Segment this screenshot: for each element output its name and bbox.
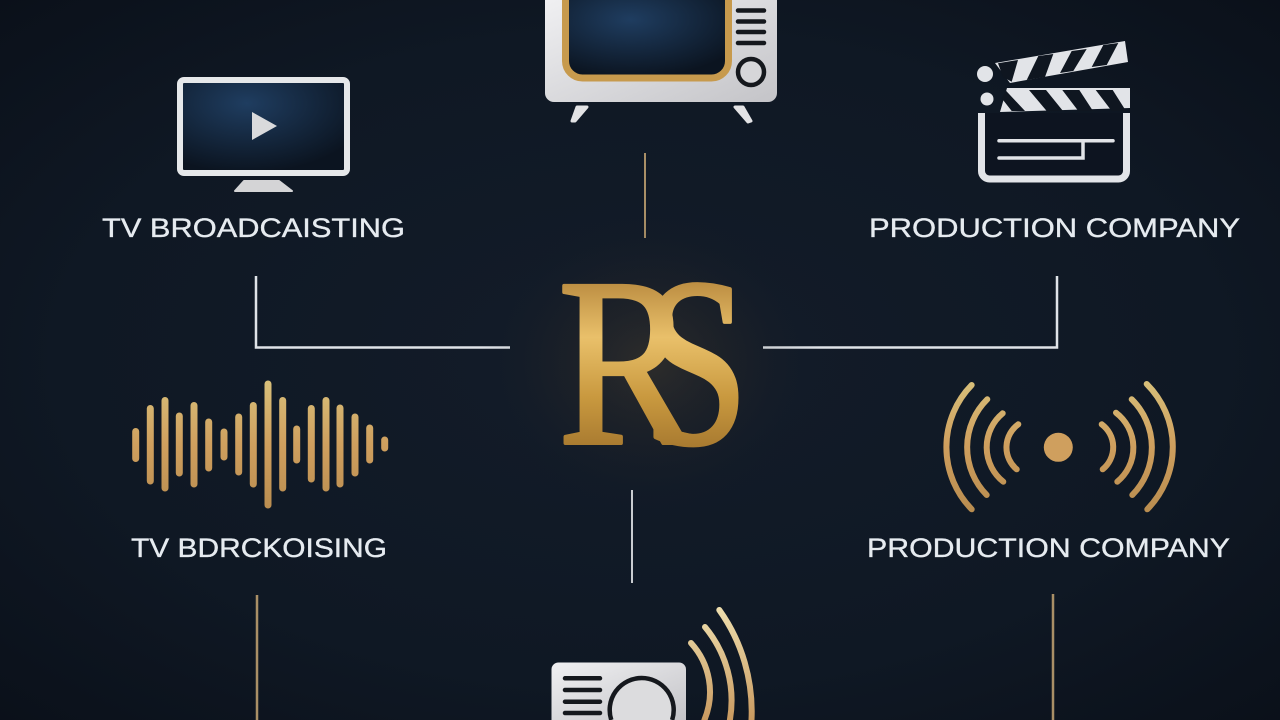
- connector: bottom centre: [631, 490, 633, 583]
- icon: broadcast signal: [946, 384, 1173, 509]
- label: TV broadcasting: TV BROADCAISTING: [102, 213, 405, 243]
- icon: clapperboard: [977, 41, 1130, 179]
- connector: left elbow: [256, 276, 510, 348]
- label: TV broadcasting lower: TV BDRCKOISING: [131, 533, 387, 563]
- connector: bottom right: [1052, 594, 1054, 720]
- icon: sound wave: [136, 384, 385, 505]
- icon: projector with signal arcs: [552, 610, 752, 720]
- icon: monitor with play button: [180, 80, 347, 191]
- logo: RS monogram: R: [558, 231, 696, 496]
- connector: top centre: [644, 153, 646, 238]
- connector: right elbow: [763, 276, 1057, 348]
- label: production company lower: PRODUCTION COMPANY: [867, 533, 1230, 563]
- icon: retro television: [545, 0, 777, 122]
- connector: bottom left: [256, 595, 258, 720]
- logo: RS monogram: S: [642, 230, 749, 496]
- label: production company top: PRODUCTION COMPANY: [869, 213, 1240, 243]
- logo glow: [480, 212, 820, 512]
